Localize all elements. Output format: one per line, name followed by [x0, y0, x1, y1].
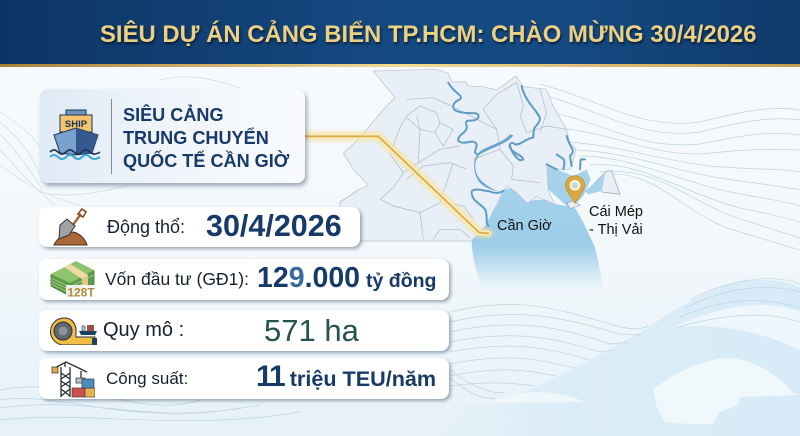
project name text [123, 104, 290, 171]
icon: shovel [53, 208, 88, 246]
map label: Cái Mép - Thị Vải [589, 204, 643, 238]
icon: ship [49, 110, 100, 160]
value: 11 triệu TEU/năm [256, 360, 436, 393]
land [340, 69, 576, 241]
icon: location pin [565, 176, 585, 203]
district boundaries [340, 83, 567, 239]
main river [474, 134, 513, 192]
value: 571 ha [264, 313, 359, 348]
panel: scale [39, 310, 449, 351]
icon: money stack [50, 261, 95, 298]
map label: Cái Mép - Thị Vải: Cái Mép [589, 204, 643, 220]
header band [0, 0, 800, 64]
panel: investment [39, 259, 449, 300]
label: Công suất: [106, 369, 188, 388]
map of Ho Chi Minh City area [305, 69, 620, 293]
divider [111, 99, 112, 174]
project name text: TRUNG CHUYỂN [123, 128, 269, 148]
route line [305, 136, 488, 233]
label: Động thổ: [107, 217, 185, 237]
map label: Cần Giờ: Cần Giờ [497, 218, 552, 234]
panel: groundbreaking date [39, 207, 360, 247]
panel: capacity [39, 358, 449, 399]
map label: Cái Mép - Thị Vải: - Thị Vải [589, 222, 643, 238]
value: 129.000 tỷ đồng [257, 262, 436, 294]
icon: crane and containers [52, 361, 95, 398]
project name text: SIÊU CẢNG [123, 105, 224, 125]
icon: ship: SHIP [65, 119, 88, 130]
bay water [472, 166, 603, 293]
icon: tape measure and ship [50, 318, 97, 345]
label: Quy mô : [103, 319, 184, 341]
label: Vốn đầu tư (GĐ1): [105, 269, 249, 289]
header gold divider [0, 64, 800, 67]
project name text: QUỐC TẾ CẦN GIỜ [123, 151, 289, 171]
rivers [448, 83, 585, 226]
title: SIÊU DỰ ÁN CẢNG BIỂN TP.HCM: CHÀO MỪNG 30/4/2026 [100, 21, 756, 48]
panel: project name [40, 89, 305, 183]
value: 30/4/2026 [206, 209, 342, 243]
